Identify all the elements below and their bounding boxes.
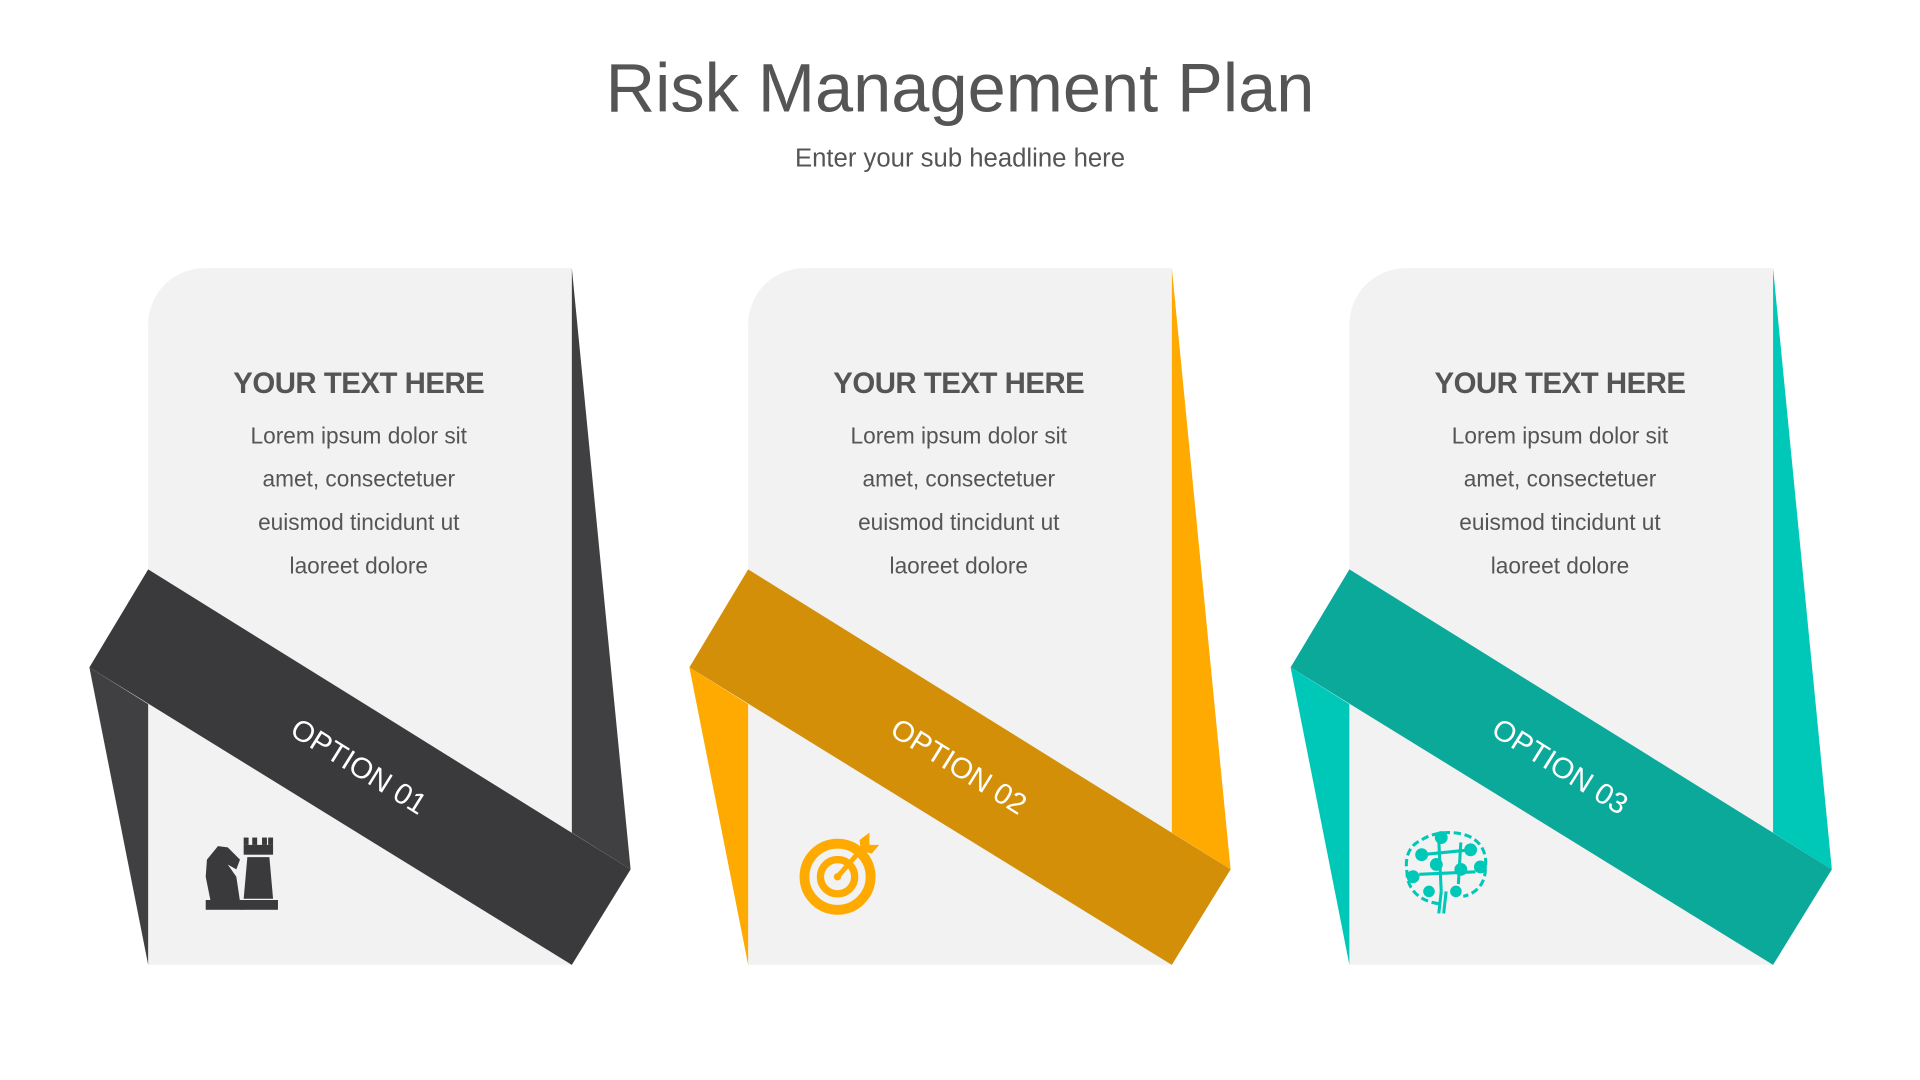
band label: OPTION 03: [1486, 712, 1634, 821]
card background: [748, 268, 1172, 965]
right strip: [1172, 268, 1231, 869]
body text: Lorem ipsum dolor sit: [251, 422, 468, 448]
body text: Lorem ipsum dolor sit: [1452, 422, 1669, 448]
band: [1291, 569, 1832, 965]
right strip: [572, 268, 631, 869]
body text: euismod tincidunt ut: [1459, 509, 1661, 535]
panel: option 01: [89, 268, 631, 965]
body text: laoreet dolore: [890, 553, 1028, 579]
card background: [1349, 268, 1773, 965]
heading: YOUR TEXT HERE: [833, 367, 1084, 400]
body text: Lorem ipsum dolor sit: [851, 422, 1068, 448]
panel: option 02: [689, 268, 1231, 965]
icon: brain network: [1406, 833, 1486, 913]
body text: amet, consectetuer: [1464, 466, 1657, 492]
right strip: [1773, 268, 1832, 869]
band label: OPTION 01: [285, 712, 432, 821]
band: [689, 569, 1231, 965]
icon: chess: [206, 838, 278, 910]
body text: laoreet dolore: [290, 553, 428, 579]
body text: euismod tincidunt ut: [858, 509, 1060, 535]
body text: amet, consectetuer: [863, 466, 1056, 492]
heading: YOUR TEXT HERE: [1434, 367, 1686, 400]
left fold: [89, 667, 148, 965]
body text: euismod tincidunt ut: [258, 509, 460, 535]
heading: YOUR TEXT HERE: [233, 367, 484, 400]
left fold: [689, 667, 748, 965]
title: Risk Management Plan: [606, 49, 1314, 126]
band: [89, 569, 631, 965]
card background: [148, 268, 572, 965]
body text: laoreet dolore: [1491, 553, 1629, 579]
left fold: [1291, 667, 1349, 965]
band label: OPTION 02: [885, 712, 1032, 821]
icon: target: [804, 833, 879, 910]
panel: option 03: [1291, 268, 1832, 965]
subtitle: Enter your sub headline here: [795, 145, 1125, 173]
body text: amet, consectetuer: [263, 466, 456, 492]
